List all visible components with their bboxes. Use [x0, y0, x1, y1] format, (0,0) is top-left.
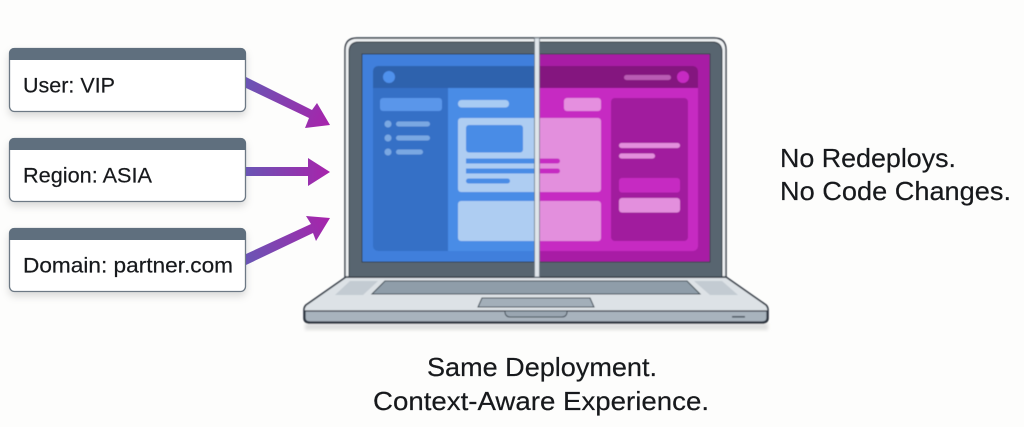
- caption: right: [780, 143, 1011, 206]
- card: user: User: VIP: [23, 74, 115, 98]
- speaker right: [694, 281, 738, 295]
- card: region: [9, 138, 246, 202]
- arrow: domain to laptop: [246, 216, 330, 265]
- caption: bottom: Context-Aware Experience.: [373, 386, 709, 416]
- content blocks: [537, 98, 601, 241]
- laptop shadow: [305, 323, 768, 330]
- front notch: [505, 311, 567, 317]
- keyboard: [372, 281, 700, 294]
- center divider: [534, 38, 540, 277]
- screen: blue half: [362, 54, 537, 262]
- laptop lid: [345, 38, 726, 277]
- screen: magenta half: [537, 54, 710, 262]
- panel: context cards: [9, 48, 246, 292]
- sidebar items: [380, 98, 442, 156]
- right side panel: [611, 98, 688, 241]
- caption: right: No Redeploys.: [780, 143, 956, 173]
- caption: bottom: Same Deployment.: [427, 352, 657, 382]
- speaker left: [335, 281, 378, 295]
- logo dot: [383, 71, 395, 83]
- header pill and avatar: [624, 75, 671, 80]
- arrow: region to laptop: [246, 158, 330, 186]
- laptop: [304, 38, 768, 330]
- content blocks: [458, 100, 537, 241]
- caption: right: No Code Changes.: [780, 176, 1011, 206]
- card: domain: Domain: partner.com: [23, 254, 233, 278]
- card: domain: [9, 228, 246, 292]
- laptop base: [304, 277, 768, 323]
- indicator light: [732, 316, 745, 318]
- caption: bottom: [373, 352, 709, 416]
- arrow: user to laptop: [246, 77, 330, 128]
- card: user: [9, 48, 246, 112]
- trackpad: [478, 298, 594, 307]
- card: region: Region: ASIA: [23, 164, 153, 188]
